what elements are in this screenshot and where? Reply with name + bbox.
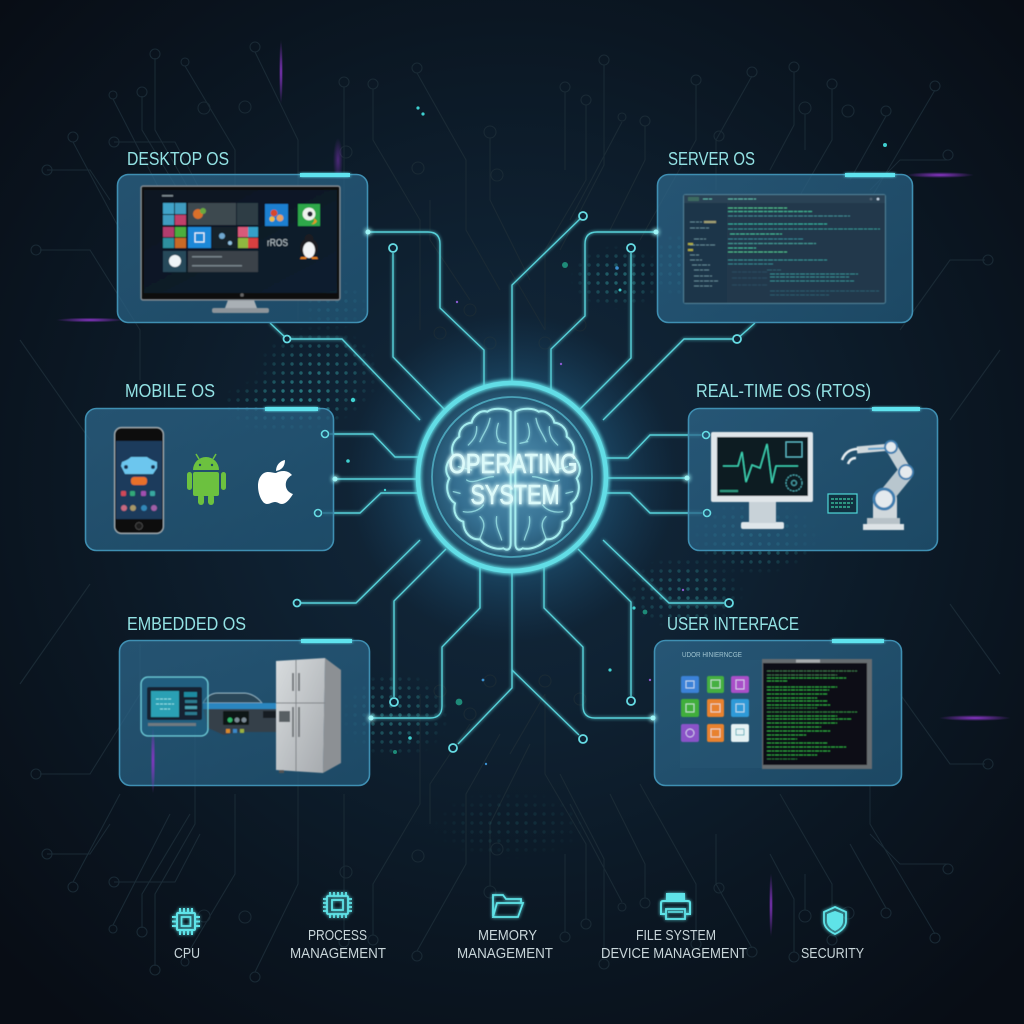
label: file system: FILE SYSTEM <box>636 927 716 944</box>
legend: memory management <box>457 895 553 962</box>
panel: embedded OS <box>120 614 370 794</box>
heading: embedded: EMBEDDED OS <box>127 614 246 634</box>
accent bar: user interface <box>832 639 884 643</box>
icon: process chip <box>323 892 352 918</box>
ring nodes on panels <box>314 430 710 516</box>
accent bar: desktop <box>300 173 350 177</box>
panel: mobile OS <box>86 381 334 550</box>
icon: monitor with heartbeat <box>711 432 813 529</box>
heading: server: SERVER OS <box>668 149 755 169</box>
server console window <box>684 194 886 304</box>
central halo <box>347 313 677 643</box>
icon: cpu <box>172 908 200 935</box>
faint circuit pattern bottom <box>20 584 1000 982</box>
icon: penguin <box>300 234 318 259</box>
icon: refrigerator <box>276 658 341 773</box>
panel frame: user interface <box>654 640 902 786</box>
icon: printer <box>661 893 690 919</box>
icon: smartphone <box>114 428 164 534</box>
panel frame: mobile <box>86 408 334 550</box>
label: device management: DEVICE MANAGEMENT <box>601 945 747 962</box>
icon: robot arm <box>842 441 913 530</box>
icon: apple <box>258 460 293 504</box>
scattered bright particles <box>259 106 887 765</box>
core disc <box>418 383 606 571</box>
trace end nodes <box>284 212 741 752</box>
faint circuit pattern top <box>20 42 1000 440</box>
icon: shield <box>824 907 846 934</box>
inner app panel <box>680 660 764 768</box>
os name: rROS <box>267 238 288 249</box>
outer glowing ring <box>418 383 606 571</box>
label line 2: MANAGEMENT <box>457 945 553 962</box>
icon: android <box>187 454 226 505</box>
panel connection nodes <box>332 230 690 720</box>
label: cpu: CPU <box>174 945 200 962</box>
accent bar: rtos <box>872 407 920 411</box>
purple accent in panel <box>150 726 156 794</box>
legend: cpu <box>172 908 200 962</box>
heading: user interface: USER INTERFACE <box>667 614 799 634</box>
circuit traces connecting core to panels <box>270 216 755 744</box>
heading: mobile: MOBILE OS <box>125 381 215 401</box>
small data screen <box>828 494 857 513</box>
heading: rtos: REAL-TIME OS (RTOS) <box>696 381 871 401</box>
icon: folder <box>493 895 523 917</box>
label: security: SECURITY <box>801 945 864 962</box>
panel frame: rtos <box>688 408 938 550</box>
central core: operating system <box>418 383 606 571</box>
icon: thermostat device <box>141 677 208 736</box>
label line 2: MANAGEMENT <box>290 945 386 962</box>
legend: file system / device management <box>601 893 747 962</box>
accent bar: mobile <box>265 407 318 411</box>
legend: process management <box>290 892 386 962</box>
icon: desktop monitor <box>141 186 340 313</box>
panel: desktop OS <box>118 149 368 322</box>
label: memory: MEMORY <box>478 927 537 944</box>
app icon grid <box>681 676 749 742</box>
panel: server OS <box>658 149 912 322</box>
heading: desktop: DESKTOP OS <box>127 149 229 169</box>
inner ring <box>432 397 592 557</box>
dot grids <box>220 230 820 860</box>
core subtitle: SYSTEM <box>470 479 560 510</box>
panel frame: embedded <box>120 640 370 786</box>
panel frame: server <box>658 174 912 322</box>
accent bar: server <box>845 173 895 177</box>
small panel label: UDOR HINIERNCGE <box>682 650 742 659</box>
legend: security <box>801 907 864 962</box>
terminal window <box>762 659 872 769</box>
icon: brain <box>446 409 580 550</box>
label: process management: PROCESS <box>308 927 367 944</box>
panel: user interface <box>654 614 902 786</box>
panel frame: desktop <box>118 174 368 322</box>
core title: OPERATING <box>448 448 578 479</box>
icon: car dashboard <box>203 693 277 735</box>
panel: real-time OS <box>688 381 938 550</box>
accent bar: embedded <box>301 639 352 643</box>
